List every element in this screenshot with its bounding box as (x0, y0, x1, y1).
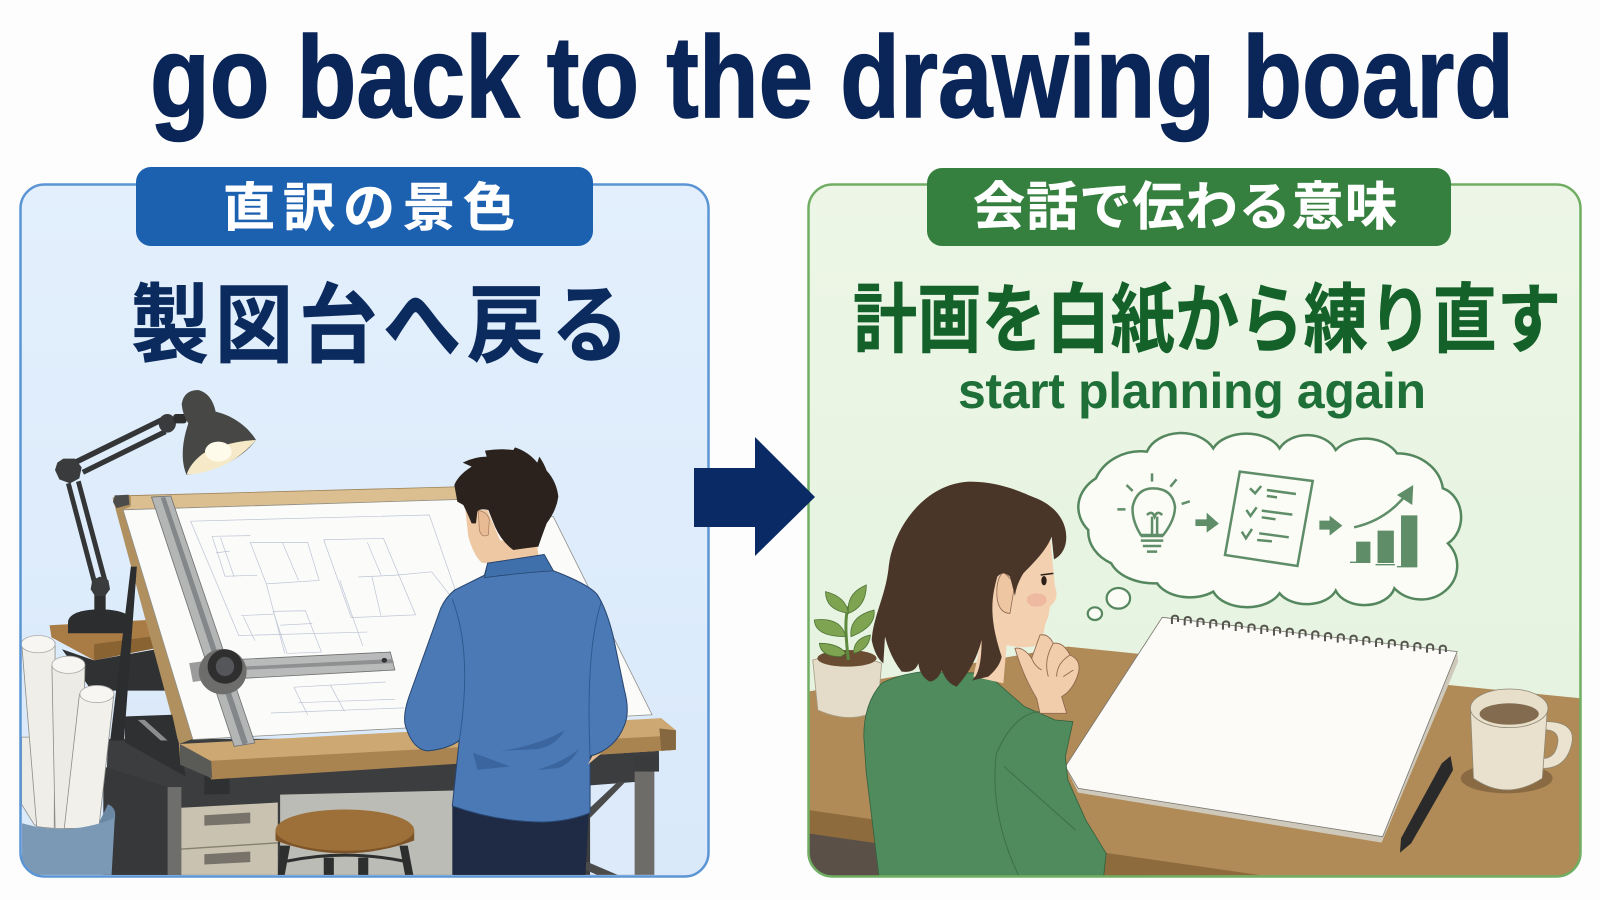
blueprint floor plan (191, 515, 461, 715)
panel: literal scene (20, 184, 709, 877)
trousers (452, 806, 589, 875)
paper rolls and bucket (21, 636, 115, 875)
badge: literal (136, 167, 593, 246)
panel: conversational meaning (808, 168, 1581, 877)
side table (50, 620, 165, 691)
coffee mug (1461, 689, 1572, 793)
desk (808, 647, 1581, 877)
desk base and drawers (103, 739, 659, 875)
panel border (20, 184, 708, 876)
badge: literal: 直訳の景色 (223, 180, 515, 238)
icon: light bulb (1117, 473, 1190, 552)
icon: arrow to chart (1319, 516, 1342, 536)
woman's head and hand (872, 482, 1079, 713)
drafting board (110, 487, 676, 779)
icon: rising bar chart (1350, 485, 1417, 567)
desk lamp (55, 390, 256, 633)
badge: conversational: 会話で伝わる意味 (973, 179, 1397, 237)
pen (1400, 756, 1453, 853)
thought bubble (1078, 433, 1461, 620)
heading: literal Japanese: 製図台へ戻る (131, 279, 629, 374)
heading: meaning in Japanese: 計画を白紙から練り直す (853, 278, 1561, 362)
badge: conversational (927, 168, 1451, 246)
panel border (808, 184, 1580, 876)
man's head (454, 447, 558, 564)
parallel ruler (152, 496, 395, 746)
icon: checklist (1225, 472, 1313, 566)
stool (276, 809, 414, 875)
illustration: man at drafting table (21, 390, 676, 875)
green sweater (864, 672, 1106, 877)
arrow (694, 437, 815, 556)
spiral notebook (1065, 616, 1458, 843)
illustration: woman thinking at desk (808, 433, 1581, 877)
icon: arrow to checklist (1195, 513, 1219, 533)
subheading: english meaning: start planning again (958, 363, 1426, 419)
potted plant (813, 585, 882, 717)
man's blue shirt (405, 555, 627, 822)
